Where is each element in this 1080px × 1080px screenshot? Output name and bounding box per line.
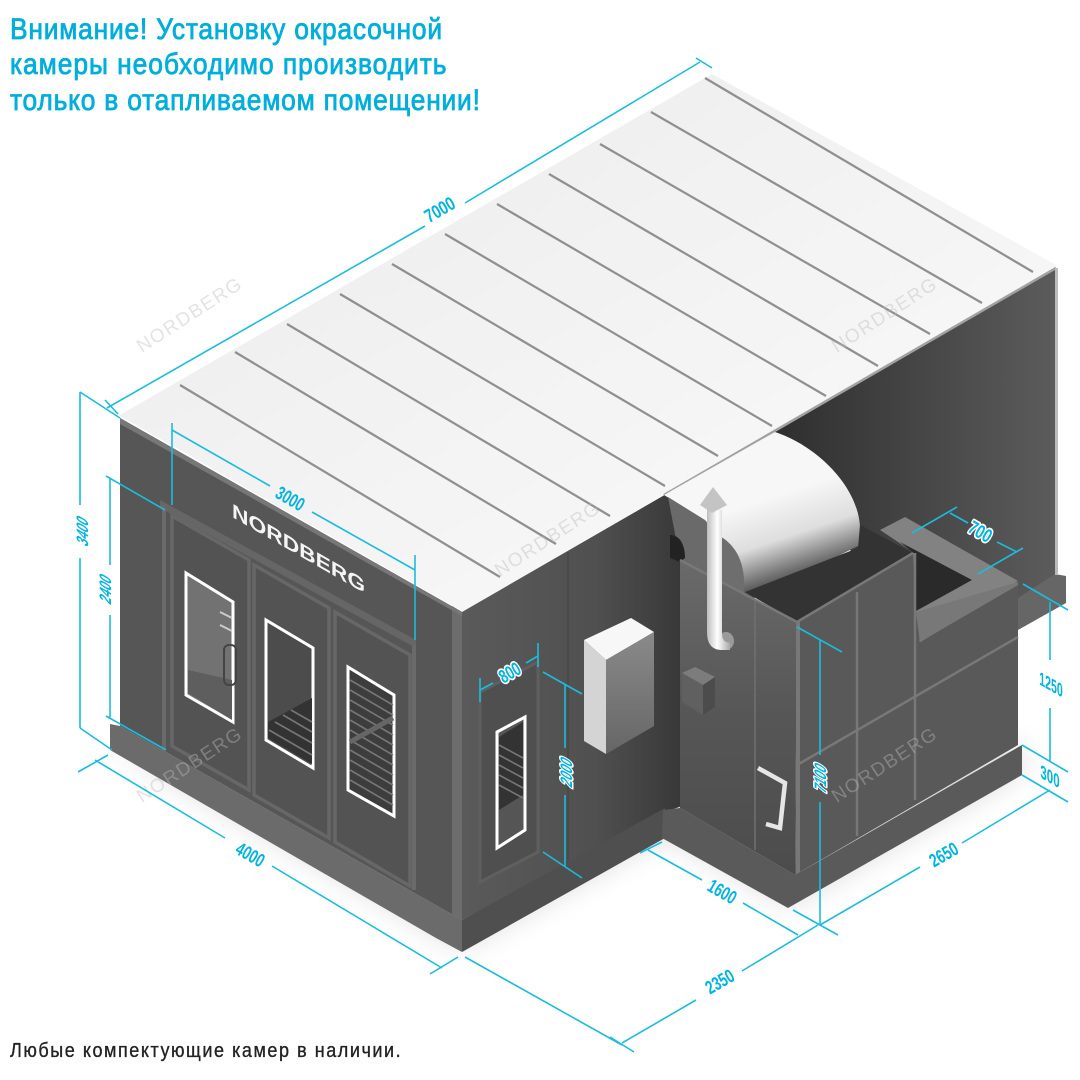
door window left: [186, 573, 236, 722]
electrical cabinet: [584, 618, 654, 754]
dimension 2000: [543, 672, 582, 878]
dimension 300: [1022, 745, 1068, 802]
dimension 1600: 1600: [704, 876, 740, 909]
front plinth: [110, 724, 462, 952]
paint booth building: [110, 74, 1066, 952]
watermarks: NORDBERG: [133, 273, 247, 357]
dimension 3400: [74, 392, 120, 750]
dimension 2350: [465, 925, 818, 1052]
duct end cap: [720, 536, 744, 594]
logo: NORDBERG: [232, 500, 365, 598]
right opening: [900, 542, 972, 611]
air duct: [664, 432, 860, 600]
dimension 4000: 4000: [232, 839, 268, 872]
watermarks: NORDBERG: [828, 723, 942, 807]
dimension 4000: [78, 755, 458, 974]
door window right, grate: [348, 667, 394, 816]
dimension 1250: 1250: [1039, 668, 1063, 703]
plinth: [662, 745, 1022, 908]
back wall: [760, 268, 1058, 600]
opening: [745, 525, 913, 622]
dimension 2350: 2350: [702, 966, 738, 999]
watermarks: NORDBERG: [828, 273, 942, 357]
dimension 7100: [797, 627, 842, 925]
dimension 7000: 7000: [421, 193, 459, 228]
floor shadow: [110, 745, 1022, 948]
watermarks: [133, 273, 942, 807]
left face: [680, 560, 797, 875]
dimension 1250: [1023, 584, 1068, 762]
dimension 700: 700: [964, 517, 995, 548]
right box top: [880, 517, 1018, 640]
dimension 800: 800: [495, 659, 525, 688]
dimension 2000: 2000: [558, 754, 576, 791]
duct shaft wall: [668, 497, 722, 582]
warning heading: только в отапливаемом помещении!: [10, 82, 480, 116]
watermarks: NORDBERG: [133, 723, 247, 807]
side door: [480, 662, 538, 882]
dimension 3000: [172, 423, 415, 640]
dimension 3400: 3400: [74, 513, 92, 550]
dimension 2650: 2650: [926, 839, 962, 872]
filter unit: [662, 517, 1022, 908]
warning heading: [10, 11, 480, 116]
shaft dark arch: [670, 535, 685, 562]
dimension 300: 300: [1040, 762, 1060, 793]
door window middle: [266, 620, 313, 768]
back wall plinth: [1018, 574, 1066, 630]
exhaust pipe with arrow: [700, 487, 734, 650]
dimension 2400: [97, 476, 166, 750]
dimension 3000: 3000: [272, 483, 308, 516]
handle: [758, 768, 785, 828]
front wall: [120, 418, 462, 920]
side wall: [452, 493, 682, 952]
dimension 700: [912, 507, 1023, 574]
right faces: [795, 553, 1018, 875]
dimension 2400: 2400: [97, 571, 115, 608]
door panels: [172, 516, 410, 886]
control box: [682, 667, 715, 715]
footer note: Любые компектующие камер в наличии.: [10, 1040, 401, 1062]
roof: [118, 74, 1058, 612]
dimension 7000: [105, 58, 712, 414]
warning heading: камеры необходимо производить: [10, 46, 446, 80]
door frame: [160, 500, 416, 648]
dimension 1600: [640, 842, 798, 935]
dimension 7100: 7100: [812, 760, 830, 797]
dimension 800: [480, 643, 538, 702]
watermarks: NORDBERG: [491, 497, 605, 581]
dimension 2650: [793, 790, 1050, 935]
warning heading: Внимание! Установку окрасочной: [10, 11, 442, 45]
